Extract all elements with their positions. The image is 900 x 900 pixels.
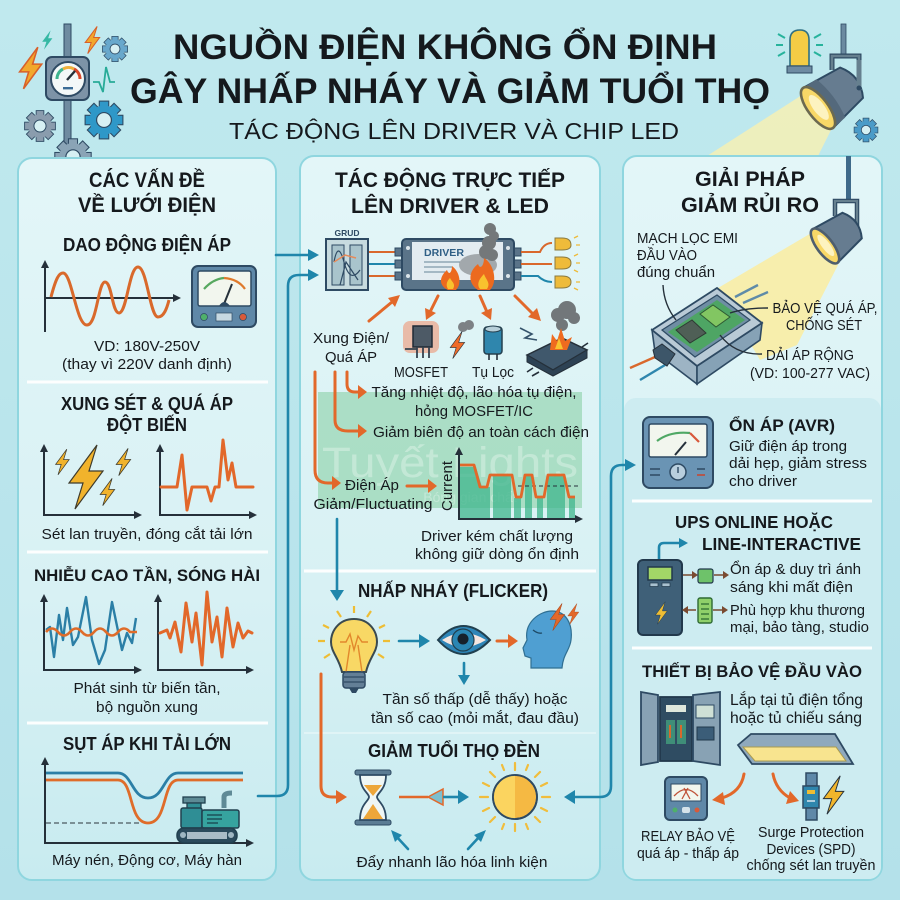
label: filter capacitor: Tụ Lọc [472, 365, 514, 381]
icon: LED panel light [738, 734, 853, 764]
icon: eye [438, 626, 490, 654]
text: cabinet install: Lắp tại tủ điện tổng [730, 692, 863, 709]
heading: solutions: GIẢI PHÁP [695, 168, 805, 191]
icon: AVR meter [643, 417, 713, 488]
icon: burnt driver [520, 301, 588, 376]
icon: head with headache [523, 603, 579, 668]
label: wide voltage range: DẢI ÁP RỘNG [766, 347, 854, 364]
text: surge label: Xung Điện/ [313, 330, 390, 347]
heading: direct impact [335, 168, 565, 218]
text: UPS benefits: sáng khi mất điện [730, 579, 853, 596]
icon: MOSFET [403, 321, 439, 358]
label: SPD: Devices (SPD) [766, 842, 856, 858]
label: SPD: chống sét lan truyền [746, 858, 876, 874]
arrows: driver damage [369, 295, 541, 321]
text: UPS benefits: Ổn áp & duy trì ánh [730, 560, 861, 578]
caption: harmonic sources [74, 680, 220, 716]
heading: grid problems [78, 169, 216, 217]
text: flicker frequency: tần số cao (mỏi mắt, đau đầu) [371, 710, 579, 727]
label: surge protection: BẢO VỆ QUÁ ÁP, [772, 300, 878, 317]
caption: voltage range: (thay vì 220V danh định) [62, 356, 232, 373]
text: driver quality: không giữ dòng ổn định [415, 546, 579, 563]
chart: lightning strikes [40, 444, 142, 519]
panel: grid problems [18, 158, 276, 880]
text: UPS benefits: mại, bảo tàng, studio [730, 619, 869, 636]
watermark block [318, 392, 582, 508]
arrows: hourglass and sun [399, 789, 469, 805]
caption: harmonic sources: bộ nguồn xung [96, 699, 198, 716]
heading: UPS [675, 511, 861, 554]
arrows: aging pointers [391, 830, 486, 849]
heading: grid problems: VỀ LƯỚI ĐIỆN [78, 193, 216, 217]
title block [130, 27, 770, 144]
text: flicker frequency: Tần số thấp (dễ thấy) hoặc [382, 691, 568, 708]
light beam and spotlight [718, 156, 869, 360]
text: AVR: Giữ điện áp trong [729, 438, 847, 455]
text: AVR: dải hẹp, giảm stress [729, 455, 867, 472]
caption: voltage range: VD: 180V-250V [94, 338, 200, 355]
icon: UPS unit [638, 560, 682, 635]
caption: harmonic sources: Phát sinh từ biến tần, [74, 680, 220, 697]
chart: voltage sine wave [41, 260, 181, 332]
panel: solutions [623, 156, 882, 880]
text: surge label [313, 330, 390, 366]
heading: solutions [681, 168, 819, 217]
heading: UPS: UPS ONLINE HOẶC [675, 511, 833, 532]
text: AVR [729, 416, 867, 490]
chart: voltage spikes [156, 440, 257, 519]
icon: voltmeter [192, 266, 256, 327]
arrow: bulb to hourglass [321, 674, 347, 804]
icon: capacitor [484, 326, 502, 360]
label: surge protection: CHỐNG SÉT [786, 316, 862, 334]
heading: UPS: LINE-INTERACTIVE [702, 534, 861, 554]
arrow: UPS connector [659, 538, 688, 560]
text: aging components: Đẩy nhanh lão hóa linh kiện [356, 854, 548, 871]
label: EMI filter: MẠCH LỌC EMI [637, 231, 738, 247]
label: wide voltage range [750, 347, 870, 382]
label: EMI filter: đúng chuẩn [637, 265, 715, 281]
label: relay: RELAY BẢO VỆ [641, 828, 735, 845]
icon: UPS outputs [682, 569, 729, 623]
subheading: harmonics: NHIỄU CAO TẦN, SÓNG HÀI [34, 566, 260, 585]
text: flicker frequency [371, 691, 579, 727]
text: effects of surge: Giảm biên độ an toàn cách điện [373, 424, 589, 441]
subheading: reduced lifespan: GIẢM TUỔI THỌ ĐÈN [368, 740, 540, 761]
icon: power meter with gears and bolts [20, 24, 128, 175]
label: SPD [746, 825, 876, 874]
label: surge protection [772, 300, 878, 334]
watermark block: Bóng gian chất [423, 489, 517, 505]
label: wide voltage range: (VD: 100-277 VAC) [750, 366, 870, 382]
text: AVR: cho driver [729, 473, 797, 490]
wires: grid to driver [369, 252, 396, 276]
icon: grid box: GRUD [334, 228, 360, 238]
icon: LED lamps on output wires [521, 236, 580, 290]
label: EMI filter: ĐẦU VÀO [637, 247, 697, 264]
text: cabinet install: hoặc tủ chiếu sáng [730, 710, 862, 727]
text: voltage drop [314, 477, 432, 513]
leader lines [663, 285, 768, 354]
caption: lightning causes: Sét lan truyền, đóng cắt tải lớn [42, 526, 253, 543]
icon: sun LED chip [480, 763, 550, 831]
text: driver quality: Driver kém chất lượng [421, 528, 573, 545]
subheading: lightning surge: XUNG SÉT & QUÁ ÁP [61, 393, 233, 414]
icon: burning driver: DRIVER [424, 247, 464, 259]
arrows: left panel to center [258, 249, 319, 796]
heading: input protection: THIẾT BỊ BẢO VỆ ĐẦU VÀO [642, 662, 862, 681]
text: UPS benefits [730, 560, 869, 636]
heading: direct impact: TÁC ĐỘNG TRỰC TIẾP [335, 168, 565, 192]
label: EMI filter [637, 231, 738, 281]
chart: voltage sag [41, 757, 254, 847]
icon: protection relay [665, 777, 707, 820]
arrow: bulb to eye [399, 634, 430, 648]
subheading: voltage fluctuation: DAO ĐỘNG ĐIỆN ÁP [63, 234, 231, 255]
caption: sag causes: Máy nén, Động cơ, Máy hàn [52, 852, 242, 869]
label: MOSFET: MOSFET [394, 365, 448, 381]
text: effects of surge: hỏng MOSFET/IC [415, 403, 533, 420]
heading: direct impact: LÊN DRIVER & LED [351, 194, 549, 218]
icon: grid box [326, 228, 368, 290]
text: driver quality [415, 528, 579, 563]
chart: noise waves [40, 594, 142, 674]
chart: unstable driver current [440, 447, 583, 523]
subheading: voltage sag: SỤT ÁP KHI TẢI LỚN [63, 733, 231, 754]
watermark block: Tuyết Lights [322, 439, 578, 487]
icon: hourglass [355, 770, 391, 825]
arrow: center to right panel [564, 459, 636, 804]
icon: spark and smoke [450, 320, 474, 359]
icon: burning driver [395, 223, 521, 290]
arrow: down to flicker [330, 519, 344, 601]
icon: electrical cabinet [641, 692, 720, 765]
subheading: lightning surge: ĐỘT BIẾN [107, 414, 187, 435]
text: cabinet install [730, 692, 863, 727]
heading: solutions: GIẢM RỦI RO [681, 193, 819, 217]
text: surge label: Quá ÁP [325, 349, 377, 366]
label: relay: quá áp - thấp áp [637, 846, 739, 862]
arrows: panel to devices [712, 774, 799, 805]
icon: driver circuit box [630, 285, 768, 384]
heading: grid problems: CÁC VẤN ĐỀ [89, 169, 205, 192]
subheading: lightning surge [61, 393, 233, 435]
icon: light bulb [318, 606, 390, 693]
icon: header spotlight and signal lamp [707, 24, 878, 156]
title block: TÁC ĐỘNG LÊN DRIVER VÀ CHIP LED [229, 117, 679, 144]
arrows: eye to head [458, 634, 518, 685]
text: AVR: ỔN ÁP (AVR) [729, 416, 835, 435]
caption: voltage range [62, 338, 232, 373]
text: effects of surge [372, 384, 589, 441]
title block: NGUỒN ĐIỆN KHÔNG ỔN ĐỊNH [173, 27, 717, 67]
arrows: surge effects [315, 372, 367, 490]
text: voltage drop: Điện Áp [345, 477, 399, 494]
icon: SPD [803, 773, 844, 820]
chart: harmonic waveform [154, 592, 254, 674]
text: UPS benefits: Phù hợp khu thương [730, 602, 865, 619]
arrow: voltage to current [407, 479, 437, 493]
panel: direct impact [300, 156, 600, 880]
text: effects of surge: Tăng nhiệt độ, lão hóa tụ điện, [372, 384, 576, 401]
title block: GÂY NHẤP NHÁY VÀ GIẢM TUỔI THỌ [130, 71, 770, 111]
icon: compressor machine [177, 793, 239, 843]
subheading: flicker: NHẤP NHÁY (FLICKER) [358, 580, 548, 601]
chart: unstable driver current: Current [440, 461, 456, 511]
label: relay [637, 828, 739, 862]
label: SPD: Surge Protection [758, 825, 864, 841]
text: voltage drop: Giảm/Fluctuating [314, 496, 432, 513]
